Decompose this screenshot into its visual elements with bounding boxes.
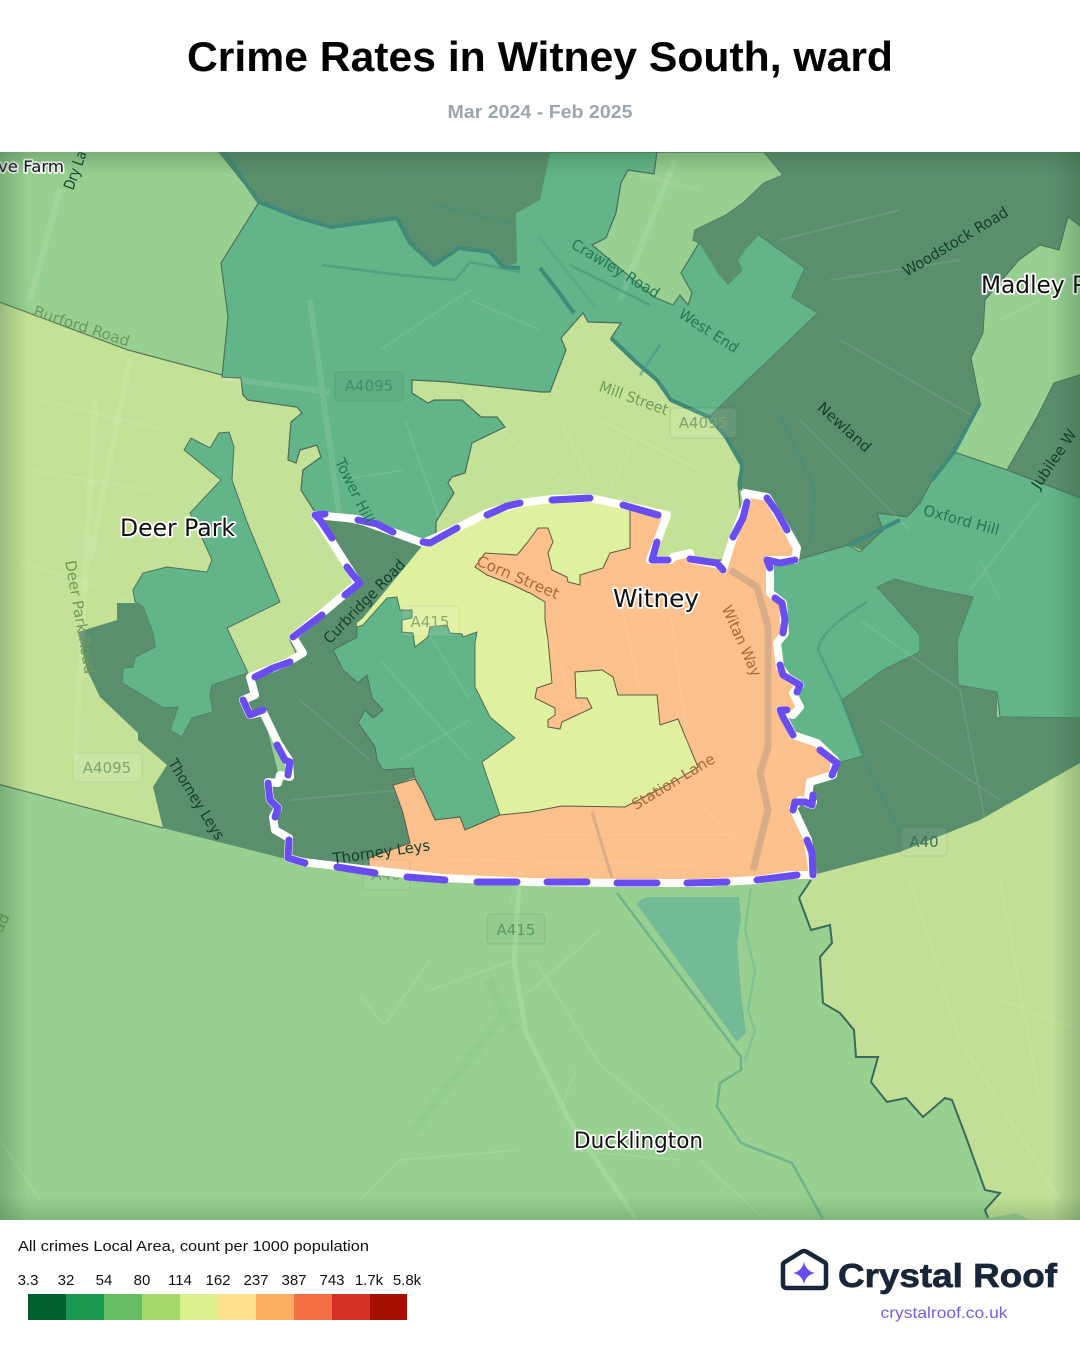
street labels: Newland — [814, 399, 875, 456]
place labels — [0, 157, 1080, 1154]
website: crystalroof.co.uk — [880, 1305, 1009, 1322]
street labels: Witan Way — [718, 603, 765, 679]
road: A415 south corridor — [514, 887, 636, 1219]
shield: A4095 north: A4095 — [345, 377, 393, 395]
place labels: Ducklington — [574, 1129, 703, 1154]
street labels: Crawley Road — [568, 235, 663, 302]
boundary: river dark edge — [799, 880, 1000, 1218]
street labels: Woodstock Road — [899, 203, 1011, 280]
place labels: Deer Park — [120, 514, 235, 542]
area: south-east dark green — [793, 579, 1080, 875]
water: reservoir — [636, 897, 746, 1042]
area: ward peach high-crime zone — [369, 493, 835, 883]
area: Mill Street yellow-green — [412, 313, 745, 560]
shield: A40 west: A40 — [371, 866, 401, 884]
shield: A40 east: A40 — [909, 833, 939, 851]
wordmark: Crystal Roof — [838, 1257, 1058, 1294]
ward interior fill — [348, 502, 698, 814]
roads: faint network — [20, 175, 1080, 1200]
legend values: 5.8k — [393, 1272, 422, 1289]
legend values: 387 — [281, 1272, 307, 1289]
shield: A4095 west: A4095 — [83, 759, 131, 777]
street labels: West End — [675, 305, 742, 357]
area: ward dark green west — [243, 515, 423, 871]
legend values: 162 — [205, 1272, 231, 1289]
legend values: 32 — [58, 1272, 74, 1289]
area: light green base — [0, 152, 1080, 1220]
area: north dark green — [219, 152, 550, 267]
legend values: 743 — [319, 1272, 345, 1289]
title: Crime Rates in Witney South, ward — [187, 33, 893, 80]
street labels: Thorney Leys — [331, 836, 431, 868]
street labels: Curbridge Road — [320, 556, 409, 647]
shield: A415 south: A415 — [497, 921, 535, 939]
shield: A4095 west — [73, 753, 142, 782]
area: Deer Park medium green — [122, 432, 280, 737]
legend values: 54 — [96, 1272, 112, 1289]
legend values: 3.3 — [18, 1272, 38, 1289]
roads: south side streets — [0, 930, 760, 1215]
street labels: Burford Road — [31, 302, 132, 350]
street labels — [0, 148, 1080, 935]
area: south-west dark green — [78, 603, 290, 860]
ward boundary purple dashes — [243, 498, 837, 883]
street labels: Thorney Leys — [164, 755, 228, 843]
area: east yellow-green south — [799, 763, 1080, 1220]
legend values: 80 — [134, 1272, 150, 1289]
street labels: Mill Street — [597, 378, 671, 419]
water: small streams — [322, 205, 900, 833]
area: ward medium green — [333, 597, 515, 830]
map edge vignette — [0, 152, 1080, 1220]
water: stream beside reservoir — [745, 888, 755, 1060]
water: south stream — [617, 893, 823, 1219]
area: Madley Park light green — [954, 217, 1080, 470]
road: A4095 corridor — [30, 160, 675, 760]
shield: A40 east — [901, 827, 947, 856]
street labels: Dry La — [60, 148, 91, 192]
area: west yellow-green — [0, 300, 358, 828]
water: river edge along north — [224, 152, 980, 545]
shield: A415 ward: A415 — [411, 613, 449, 631]
street labels: Jubilee W — [1027, 426, 1080, 493]
street labels: Deer Park Road — [61, 559, 99, 675]
water: stream through Witan Way — [730, 570, 768, 870]
shield: A4095 east: A4095 — [679, 414, 727, 432]
street labels: Station Lane — [629, 750, 718, 814]
legend colour scale — [28, 1294, 407, 1320]
street labels: Corn Street — [474, 552, 562, 603]
legend values: 237 — [243, 1272, 269, 1289]
ward boundary white line — [243, 493, 835, 883]
shield: A4095 north — [335, 372, 403, 401]
shield: A415 south — [487, 914, 545, 944]
icon: house with star — [783, 1251, 826, 1288]
street labels: Oxford Hill — [921, 501, 1001, 539]
subtitle: date range: Mar 2024 - Feb 2025 — [448, 102, 632, 122]
area: north-east dark green — [693, 152, 1080, 600]
shield: A4095 east — [670, 408, 737, 438]
road: south peach lane — [592, 812, 612, 878]
logo: Crystal Roof — [783, 1251, 1058, 1322]
legend values: 114 — [168, 1272, 192, 1289]
legend title: All crimes Local Area, count per 1000 population — [18, 1238, 369, 1255]
area: Crawley light green — [592, 152, 783, 305]
legend values: 1.7k — [355, 1272, 384, 1289]
street labels: Tower Hill — [331, 455, 378, 526]
water: faint channel — [540, 238, 595, 307]
shield: A40 west — [363, 860, 410, 890]
area: east medium green — [768, 452, 1080, 763]
legend values — [18, 1272, 422, 1289]
choropleth map panel — [0, 148, 1080, 1220]
shield: A415 ward — [402, 606, 459, 636]
field: disused runway — [414, 980, 514, 1130]
place labels: Witney — [613, 584, 699, 613]
area: north medium green — [219, 152, 818, 543]
road shields — [73, 372, 947, 944]
legend — [18, 1238, 422, 1320]
